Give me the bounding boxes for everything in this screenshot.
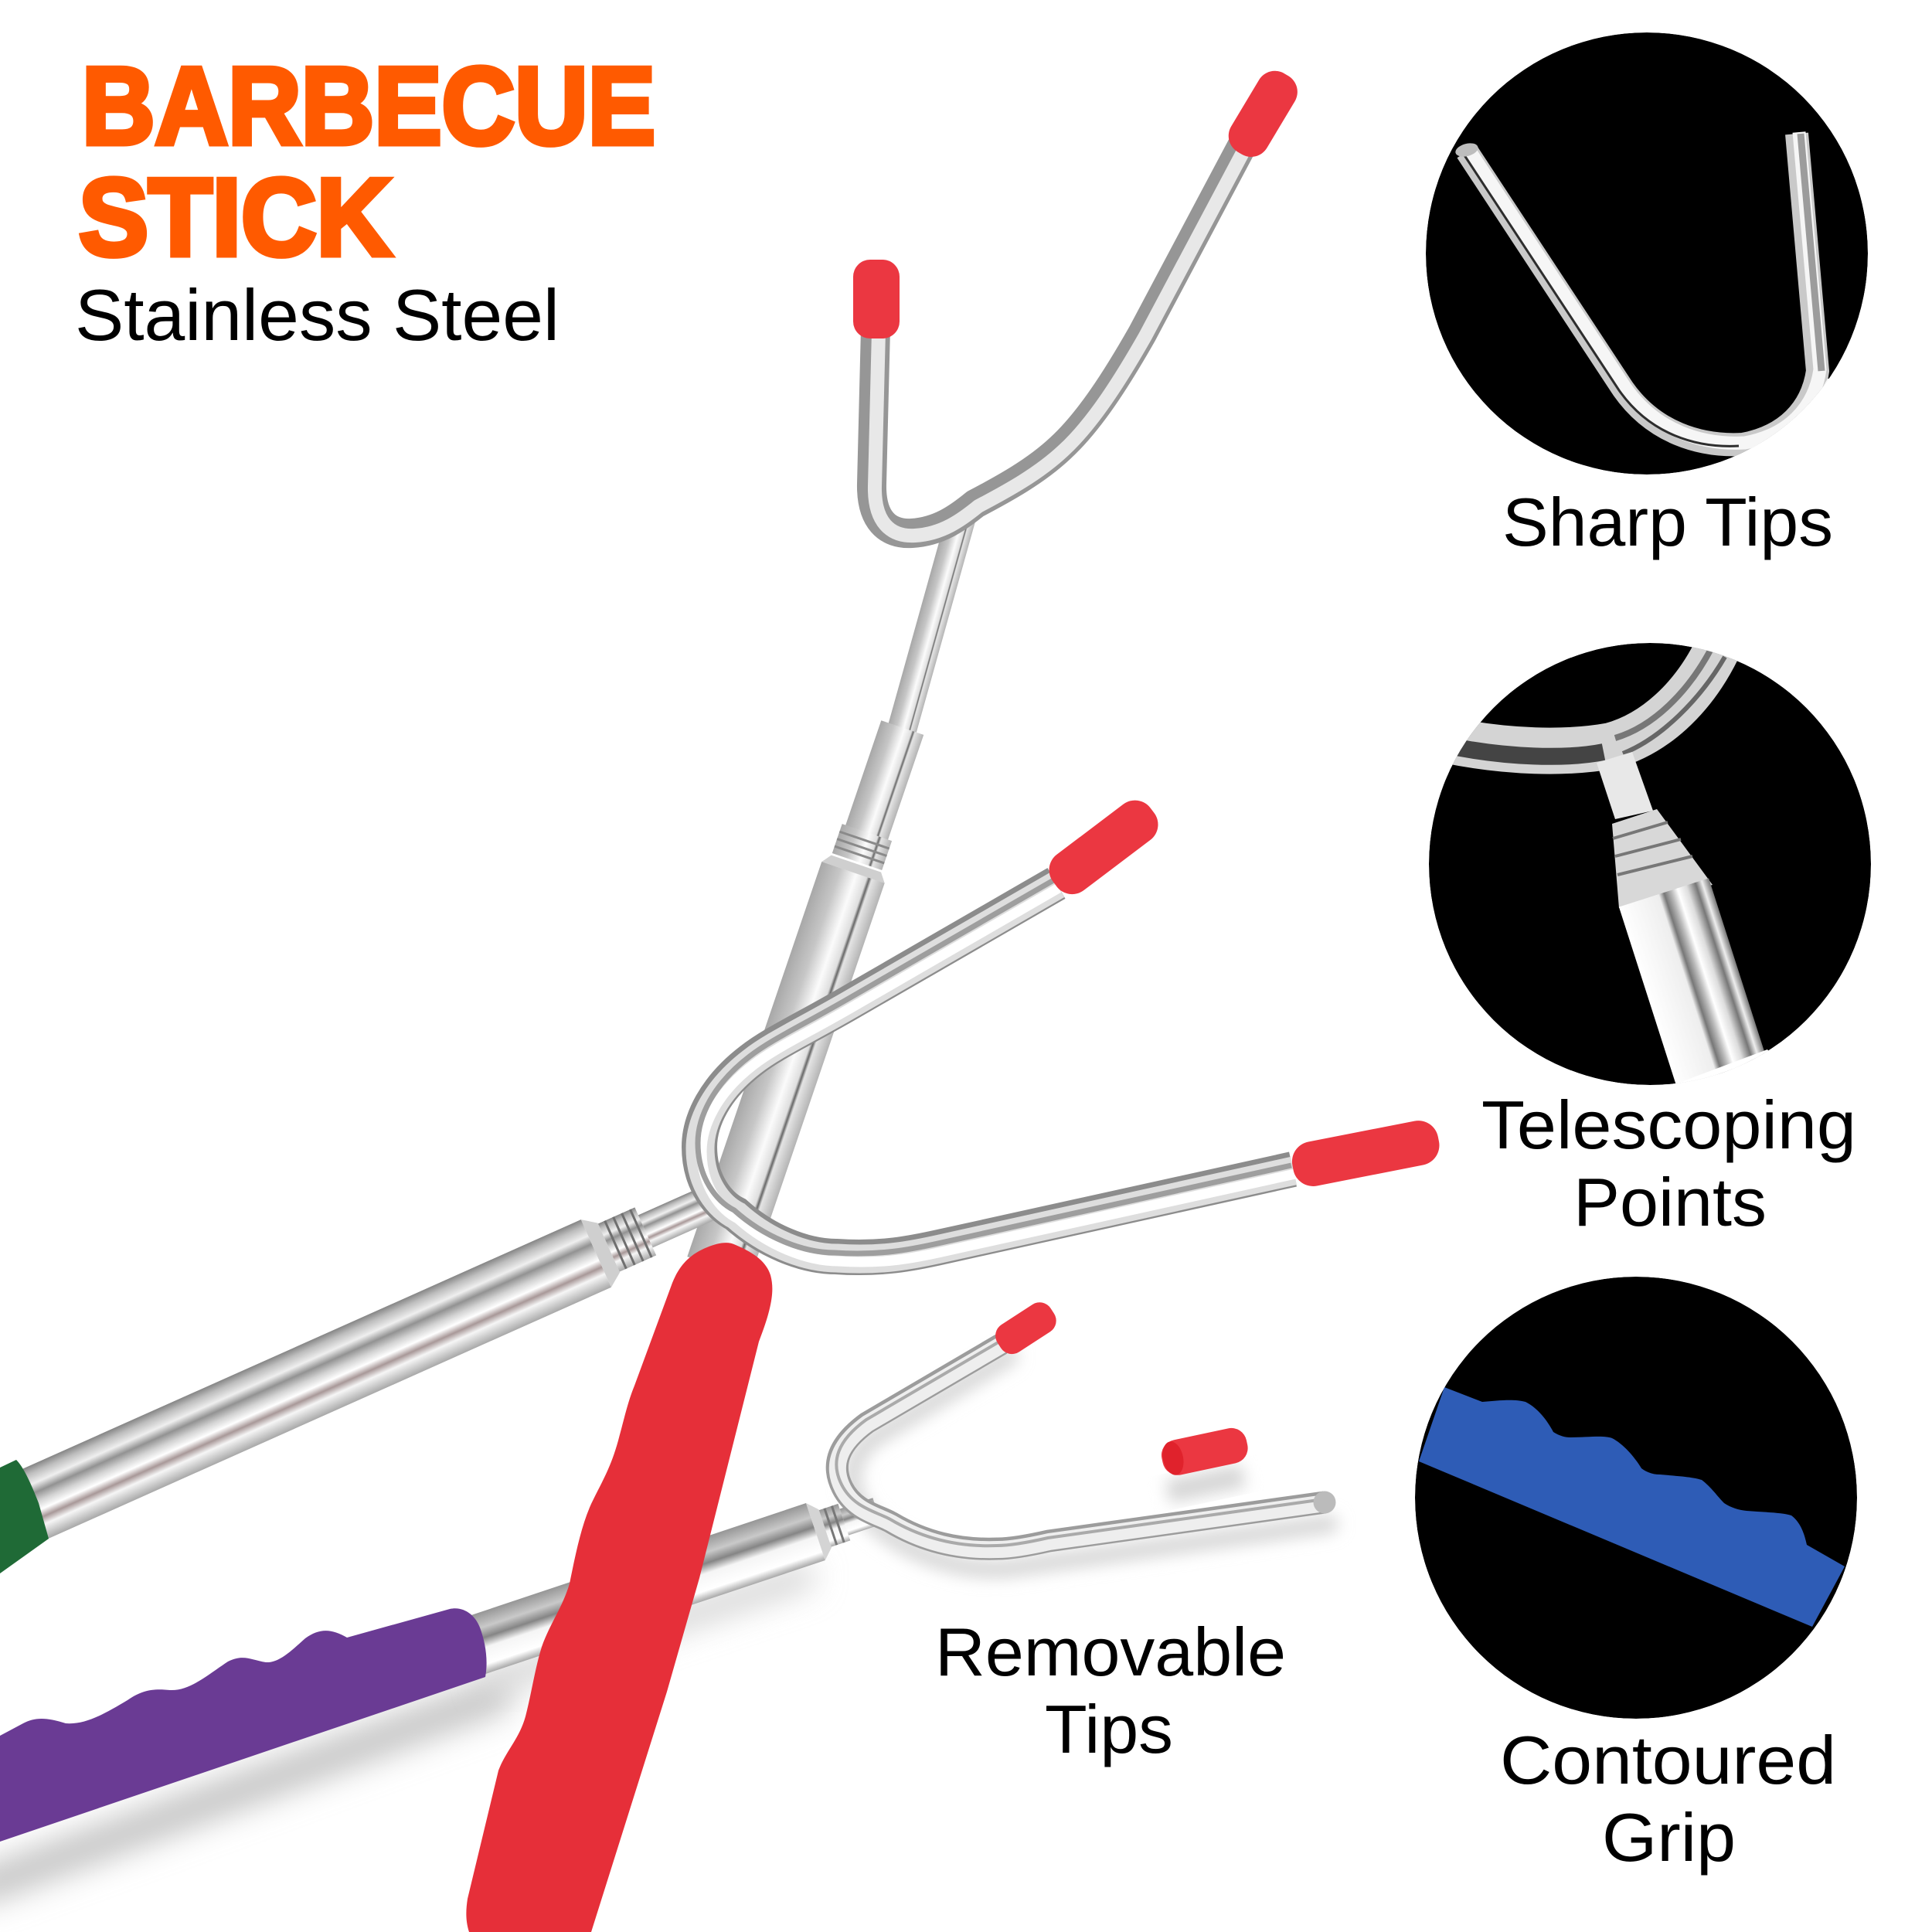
sharp tips wire <box>1454 132 1821 446</box>
upper stick shaft <box>687 512 976 1278</box>
shadows under lower stick <box>0 1356 1329 1886</box>
telescoping neck <box>1597 752 1653 819</box>
label: sharp tips: Sharp Tips <box>1502 484 1833 560</box>
title: BARBECUE <box>82 45 655 168</box>
panel: contoured grip <box>1415 1277 1857 1719</box>
white cut of circle <box>1747 379 1828 451</box>
contoured circle <box>1415 1277 1857 1719</box>
telescoping tube <box>1618 878 1765 1083</box>
label: contoured grip: Grip <box>1602 1799 1736 1876</box>
big fork red tips <box>1042 793 1443 1189</box>
white cut of circle <box>1679 1049 1768 1083</box>
purple handle <box>0 1608 487 1842</box>
small fork red tip <box>991 1298 1061 1359</box>
sharp tips circle <box>1426 32 1868 474</box>
green handle stick tube <box>0 1168 726 1573</box>
label: telescoping points: Points <box>1573 1164 1767 1240</box>
label: contoured grip <box>1500 1722 1836 1876</box>
label: removable tips: Tips <box>1045 1691 1173 1767</box>
label: contoured grip: Contoured <box>1500 1722 1836 1798</box>
label: removable tips <box>935 1614 1286 1767</box>
panel: sharp tips <box>1426 32 1868 474</box>
label: telescoping points <box>1481 1087 1856 1240</box>
title: STICK <box>79 156 392 279</box>
telescoping grooves <box>1612 809 1713 908</box>
small fork wire <box>836 1341 1335 1549</box>
label: telescoping points: Telescoping <box>1481 1087 1856 1163</box>
lower stick: small fork with purple handle <box>0 1298 1335 1842</box>
lower stick tube <box>457 1482 886 1677</box>
telescoping ring <box>1437 648 1725 757</box>
top fork red tips <box>853 64 1304 338</box>
telescoping circle <box>1429 643 1871 1085</box>
panel: telescoping points <box>1429 643 1871 1085</box>
label: removable tips: Removable <box>935 1614 1286 1690</box>
big fork wire <box>698 879 1295 1262</box>
subtitle: Stainless Steel <box>75 274 560 355</box>
contoured blue grip <box>1419 1387 1845 1627</box>
top fork wire <box>872 146 1245 536</box>
green handle <box>0 1460 49 1573</box>
title <box>79 45 655 279</box>
loose red tip <box>1158 1425 1250 1478</box>
red handle <box>466 1243 772 1932</box>
